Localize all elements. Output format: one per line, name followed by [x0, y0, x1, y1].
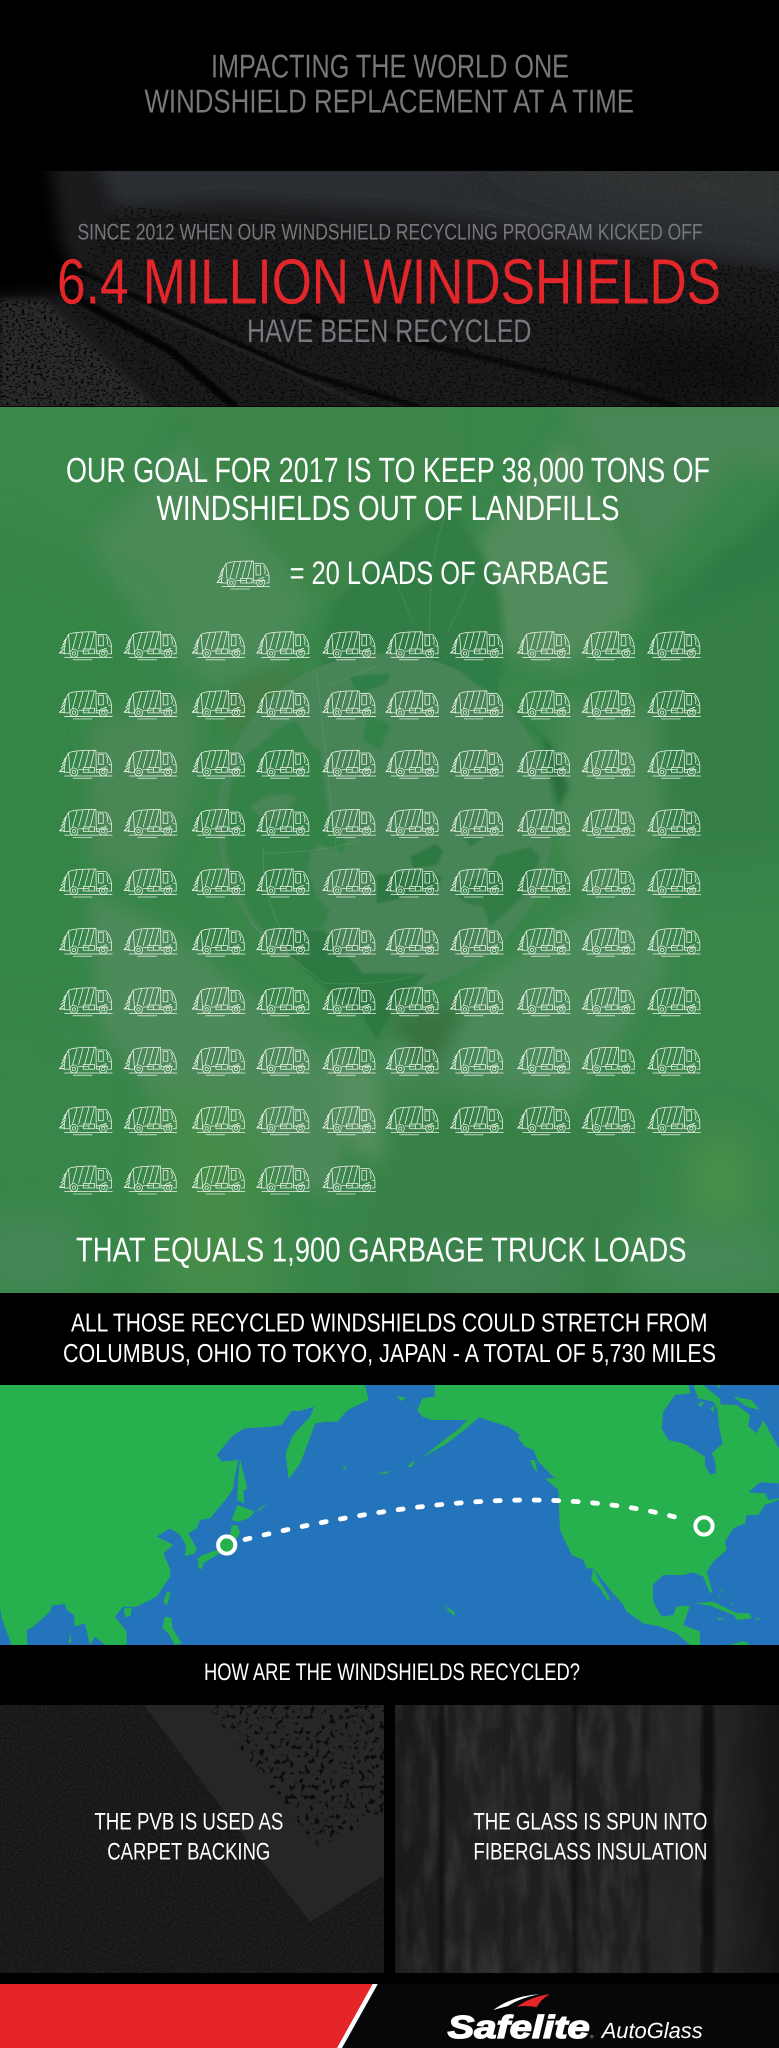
- hero text: [57, 219, 721, 349]
- arrow: dashed route: [245, 1500, 686, 1540]
- truck row 5: [60, 869, 700, 897]
- oceans: [226, 720, 347, 934]
- logo: Safelite AutoGlass: [448, 1994, 703, 2045]
- fiberglass text: FIBERGLASS INSULATION: [473, 1838, 707, 1865]
- panel: carpet backing: [0, 1705, 384, 1973]
- marker: Columbus: [695, 1517, 713, 1535]
- distance text: [63, 1308, 716, 1368]
- footer band: [0, 1984, 779, 2048]
- truck row 6: [60, 928, 700, 956]
- panel: fiberglass insulation: [395, 1700, 779, 1980]
- goal heading: [66, 451, 710, 528]
- land: Asia: [0, 1385, 369, 1645]
- heading: how are the windshields recycled: HOW ARE THE WINDSHIELDS RECYCLED?: [204, 1659, 580, 1686]
- truck row 4: [60, 810, 700, 837]
- photo: hands background: [0, 396, 779, 1311]
- truck row 2: [60, 691, 700, 719]
- lower hands and bokeh: [89, 893, 348, 1198]
- map: Tokyo to Columbus: [0, 1385, 779, 1645]
- truck row 7: [60, 988, 700, 1016]
- fiberglass text: THE GLASS IS SPUN INTO: [473, 1808, 707, 1835]
- legend text: = 20 LOADS OF GARBAGE: [290, 555, 609, 591]
- logo wordmark: Safelite: [448, 2009, 590, 2045]
- truck row 8: [60, 1047, 700, 1075]
- icon: legend garbage truck: [217, 561, 270, 589]
- carpet backing text: [94, 1808, 283, 1865]
- panel: green goal section: [0, 396, 779, 1311]
- truck row 10: [60, 1166, 376, 1194]
- panel: recycled windshields hero: [0, 160, 779, 412]
- legend: truck equals 20 loads: [217, 555, 609, 591]
- white slanted stripe: [337, 1984, 378, 2048]
- icon: logo swoosh: [493, 1994, 550, 2010]
- marker: Tokyo: [218, 1536, 235, 1554]
- truck row 3: [60, 750, 700, 778]
- land: North America: [417, 1385, 779, 1645]
- panel: distance statement: [0, 1293, 779, 1385]
- carpet backing text: THE PVB IS USED AS: [94, 1808, 283, 1835]
- goal heading: WINDSHIELDS OUT OF LANDFILLS: [156, 489, 620, 528]
- land: Pacific islands: [343, 1396, 455, 1616]
- truck row 9: [60, 1107, 700, 1135]
- registered mark: ®: [590, 2034, 594, 2040]
- have been recycled: HAVE BEEN RECYCLED: [247, 313, 532, 349]
- water: Hudson Bay and Atlantic inlets: [662, 1385, 779, 1500]
- logo descriptor: AutoGlass: [600, 2018, 703, 2043]
- fiberglass text: [473, 1808, 707, 1865]
- carpet backing text: CARPET BACKING: [107, 1838, 270, 1865]
- leaf: [327, 508, 505, 669]
- red slanted block: [0, 1984, 373, 2048]
- title: [144, 48, 634, 120]
- photo: globe: [217, 653, 568, 1040]
- title: IMPACTING THE WORLD ONE: [211, 48, 569, 84]
- truck row 1: [60, 632, 700, 660]
- pictogram: garbage truck grid: [60, 632, 700, 1194]
- title: WINDSHIELD REPLACEMENT AT A TIME: [144, 82, 634, 120]
